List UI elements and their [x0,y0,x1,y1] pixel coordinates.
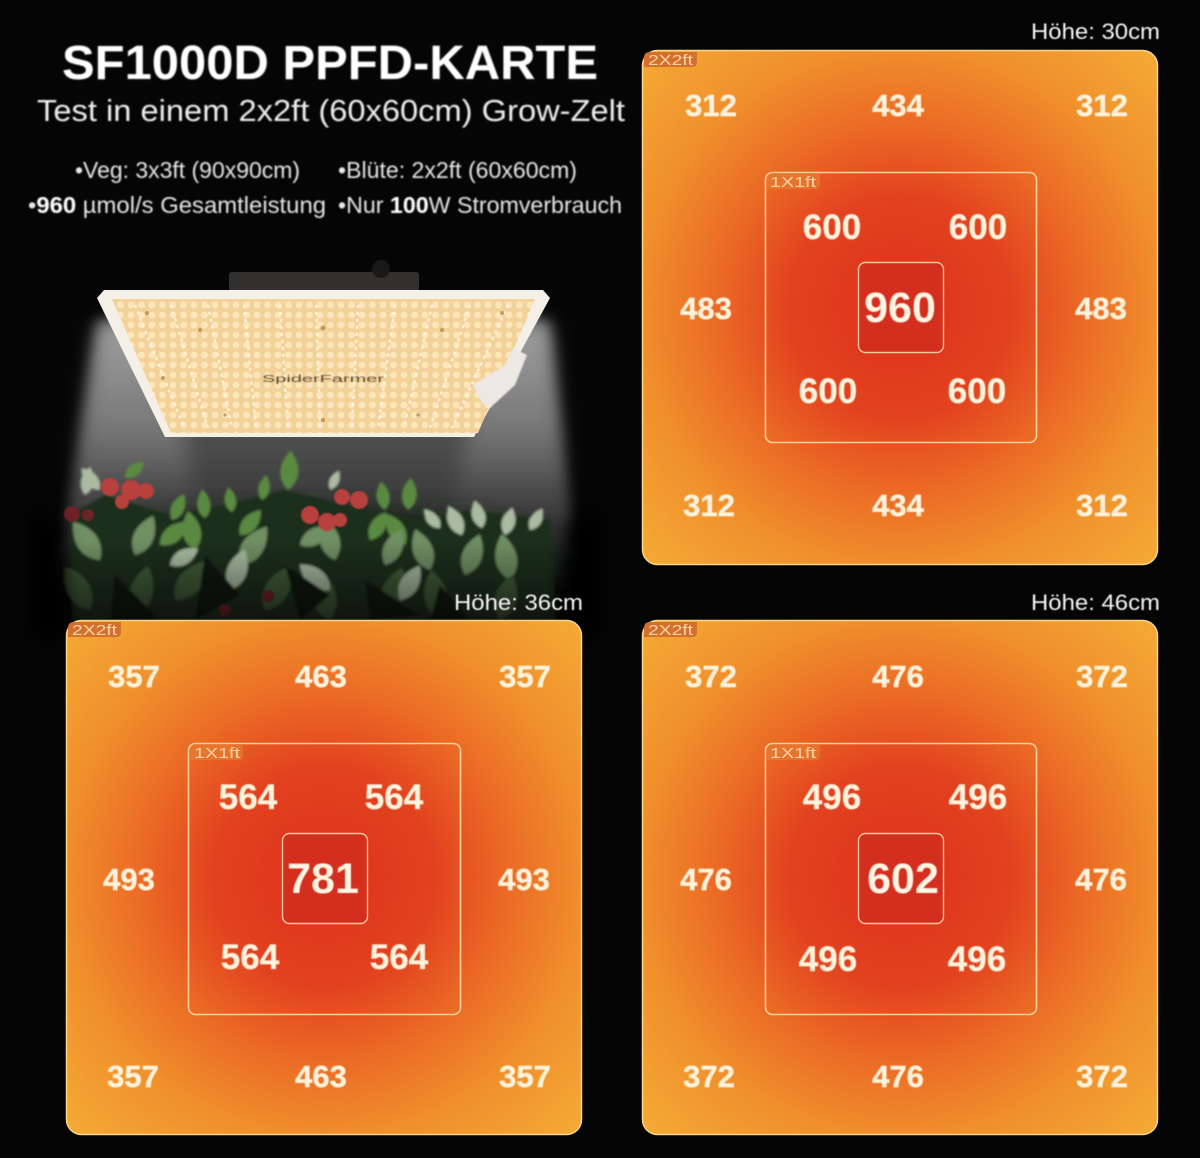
readings: 960 [864,284,936,332]
readings: 600 [799,372,857,411]
center cell [282,834,368,924]
title: SF1000D PPFD-KARTE [62,37,598,90]
center cell [858,262,944,352]
readings: 476 [872,659,924,694]
readings: 564 [221,938,280,977]
readings [680,659,1128,1094]
readings: 434 [872,88,925,123]
zone: 1x1ft: 1X1ft [770,745,817,762]
readings: 781 [287,855,359,903]
readings: 434 [872,488,925,523]
readings: 476 [872,1059,924,1094]
readings: 357 [108,659,160,694]
readings: 312 [685,88,737,123]
readings: 496 [799,940,857,979]
tag: 2x2ft [68,622,121,639]
zone: 1x1ft [766,744,1036,1014]
readings: 312 [1076,488,1128,523]
readings: 483 [1075,291,1127,326]
readings: 463 [295,1059,347,1094]
panel: 46cm PPFD map [642,620,1158,1134]
panel side bracket [473,348,527,408]
spec: flowering: •Blüte: 2x2ft (60x60cm) [338,157,577,183]
readings: 312 [1076,88,1128,123]
readings: 564 [365,778,424,817]
readings: 564 [370,938,429,977]
readings [103,659,551,1094]
plants with tomatoes [30,450,600,640]
readings: 496 [949,778,1007,817]
readings: 564 [219,778,278,817]
readings: 496 [803,778,861,817]
specs list [28,157,622,218]
zone: 1x1ft [188,744,460,1014]
readings: 600 [948,372,1006,411]
zone: 1x1ft: 1X1ft [194,745,241,762]
tomatoes [64,478,368,616]
height label: 46cm: Höhe: 46cm [1031,590,1160,615]
panel: 36cm PPFD map [66,620,582,1134]
panel: 30cm PPFD map [642,50,1158,564]
spec: power: •Nur 100W Stromverbrauch [338,192,622,218]
readings: 463 [295,659,347,694]
readings: 602 [867,855,939,903]
readings: 372 [1076,1059,1128,1094]
readings: 600 [803,208,861,247]
brand name on panel: SpiderFarmer [262,374,385,385]
readings: 372 [685,659,737,694]
readings: 496 [948,940,1006,979]
readings: 483 [680,291,732,326]
zone: 1x1ft [766,172,1036,442]
readings: 493 [103,862,155,897]
readings: 357 [499,659,551,694]
readings: 357 [499,1059,551,1094]
zone: 1x1ft: 1X1ft [770,174,817,191]
tag: 2x2ft [644,52,697,69]
height label: 36cm: Höhe: 36cm [454,590,583,615]
LED panel [97,290,550,437]
center cell [858,834,944,924]
height label: 30cm: Höhe: 30cm [1031,19,1160,44]
lamp driver housing [229,260,419,296]
spec: veg: •Veg: 3x3ft (90x90cm) [75,157,300,183]
tag: 2x2ft [644,622,697,639]
readings: 476 [680,862,732,897]
light beam [60,320,576,560]
readings: 312 [683,488,735,523]
readings: 372 [1076,659,1128,694]
readings: 600 [949,208,1007,247]
readings: 357 [107,1059,159,1094]
illustration: grow light over plants [30,260,600,640]
tag: 2x2ft: 2X2ft [648,52,694,69]
tag: 2x2ft: 2X2ft [648,622,694,639]
subtitle: Test in einem 2x2ft (60x60cm) Grow-Zelt [37,93,625,128]
readings [680,88,1128,523]
readings: 476 [1075,862,1127,897]
spec: total output: •960 µmol/s Gesamtleistung [28,192,326,218]
tag: 2x2ft: 2X2ft [72,622,118,639]
readings: 493 [498,862,550,897]
readings: 372 [683,1059,735,1094]
